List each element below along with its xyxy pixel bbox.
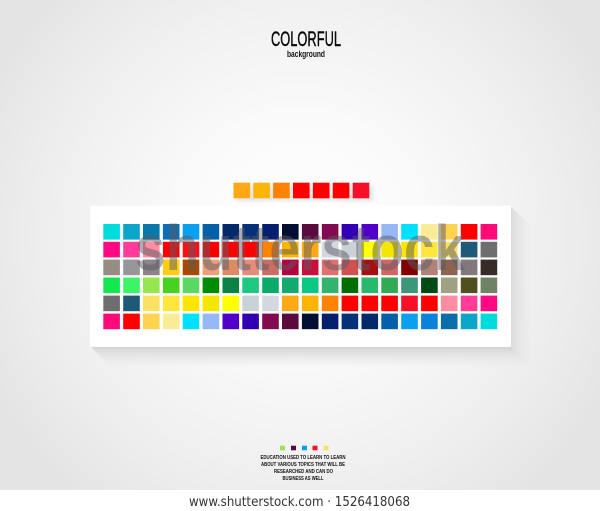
row 5 (103, 296, 497, 311)
caption text: BUSINESS AS WELL (282, 476, 324, 482)
caption text (260, 455, 346, 482)
footer strip (0, 490, 600, 511)
row 2 (103, 242, 497, 257)
title: COLORFUL (271, 28, 341, 51)
swatch grid (103, 224, 497, 329)
row 1 (103, 224, 497, 240)
watermark: shutterstock (135, 212, 465, 284)
caption text: RESEARCHED AND CAN DO (274, 469, 333, 475)
top row of swatches (234, 183, 373, 201)
title (271, 28, 341, 59)
card shadow (91, 207, 532, 368)
row 4 (103, 278, 497, 293)
small legend squares (280, 446, 328, 450)
row 6 (103, 314, 497, 329)
footer strip: www.shutterstock.com · 1526418068 (189, 495, 410, 510)
caption text: ABOUT VARIOUS TOPICS THAT WILL BE (261, 462, 345, 468)
white card (90, 206, 511, 347)
row 3 (103, 260, 497, 275)
title: background (287, 49, 325, 59)
caption text: EDUCATION USED TO LEARN TO LEARN (260, 455, 346, 461)
